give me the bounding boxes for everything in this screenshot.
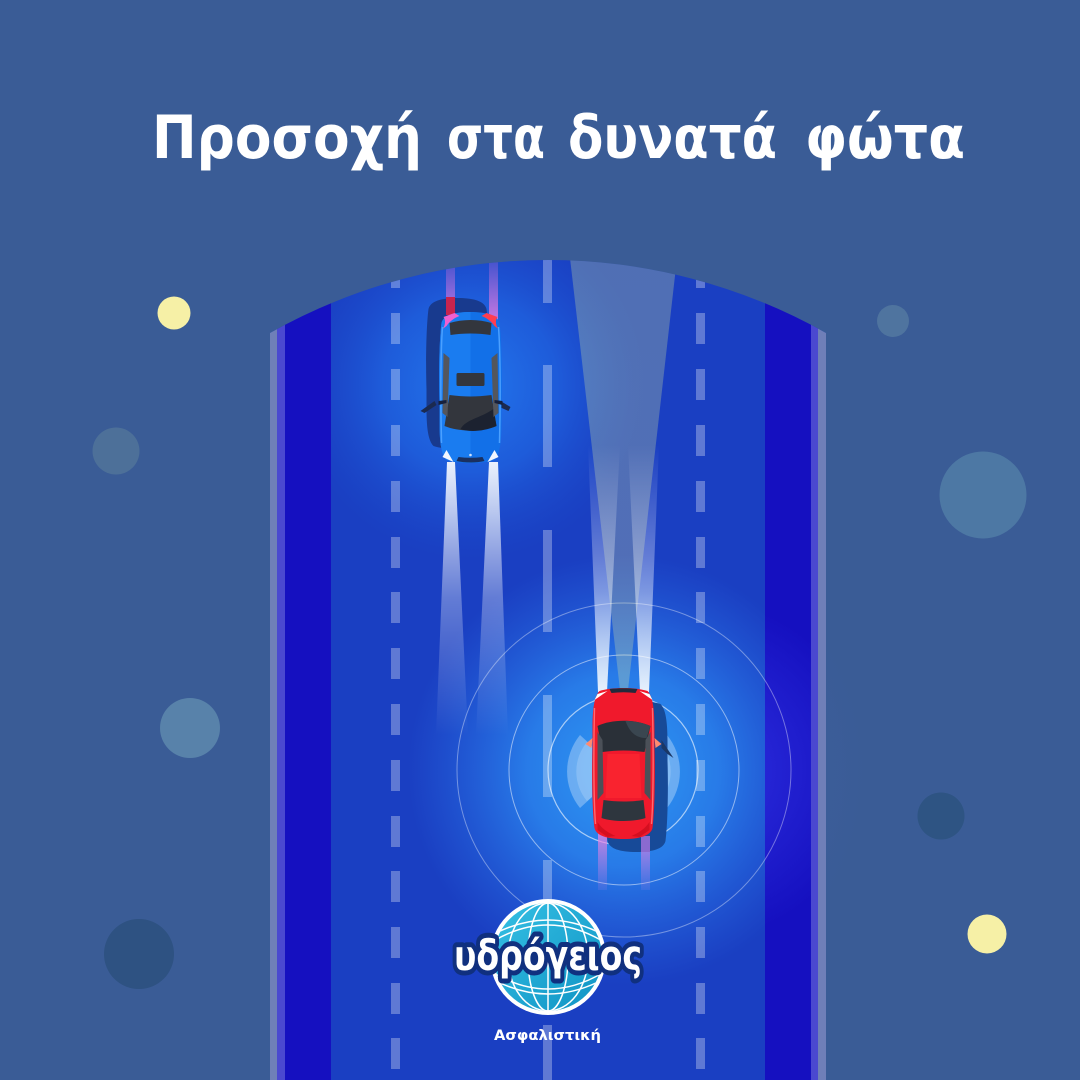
globe xyxy=(490,899,606,1015)
logo: Υδρόγειος xyxy=(454,899,642,1044)
title: δυνατά xyxy=(568,103,777,173)
title: Προσοχή xyxy=(152,103,422,173)
blue car tail light trails xyxy=(446,258,498,320)
sonar rings xyxy=(457,603,791,937)
car shadow xyxy=(605,701,668,852)
title: στα xyxy=(447,103,545,173)
red car xyxy=(586,688,674,852)
lane dashes xyxy=(391,255,705,1080)
decorative circles xyxy=(92,296,1026,989)
sonar wedges xyxy=(567,735,680,808)
red car tail light trails xyxy=(598,832,650,890)
tagline: Ασφαλιστική xyxy=(494,1028,601,1044)
road glow around red car xyxy=(430,579,765,962)
red car right beam xyxy=(629,458,658,692)
blue car xyxy=(420,297,510,463)
road edge strips xyxy=(270,250,826,1080)
road xyxy=(270,210,838,1080)
car shadow xyxy=(426,298,489,449)
road glow around blue car xyxy=(332,260,598,522)
wordmark: υδρόγειος xyxy=(454,931,642,980)
car body xyxy=(439,312,502,463)
car body xyxy=(592,688,655,839)
red car outer glow xyxy=(373,520,873,1020)
blue car right beam xyxy=(477,462,507,718)
title: φώτα xyxy=(805,103,965,173)
red car high beam cone xyxy=(570,258,677,690)
blue car left beam xyxy=(437,462,467,719)
red car left beam xyxy=(589,458,619,692)
